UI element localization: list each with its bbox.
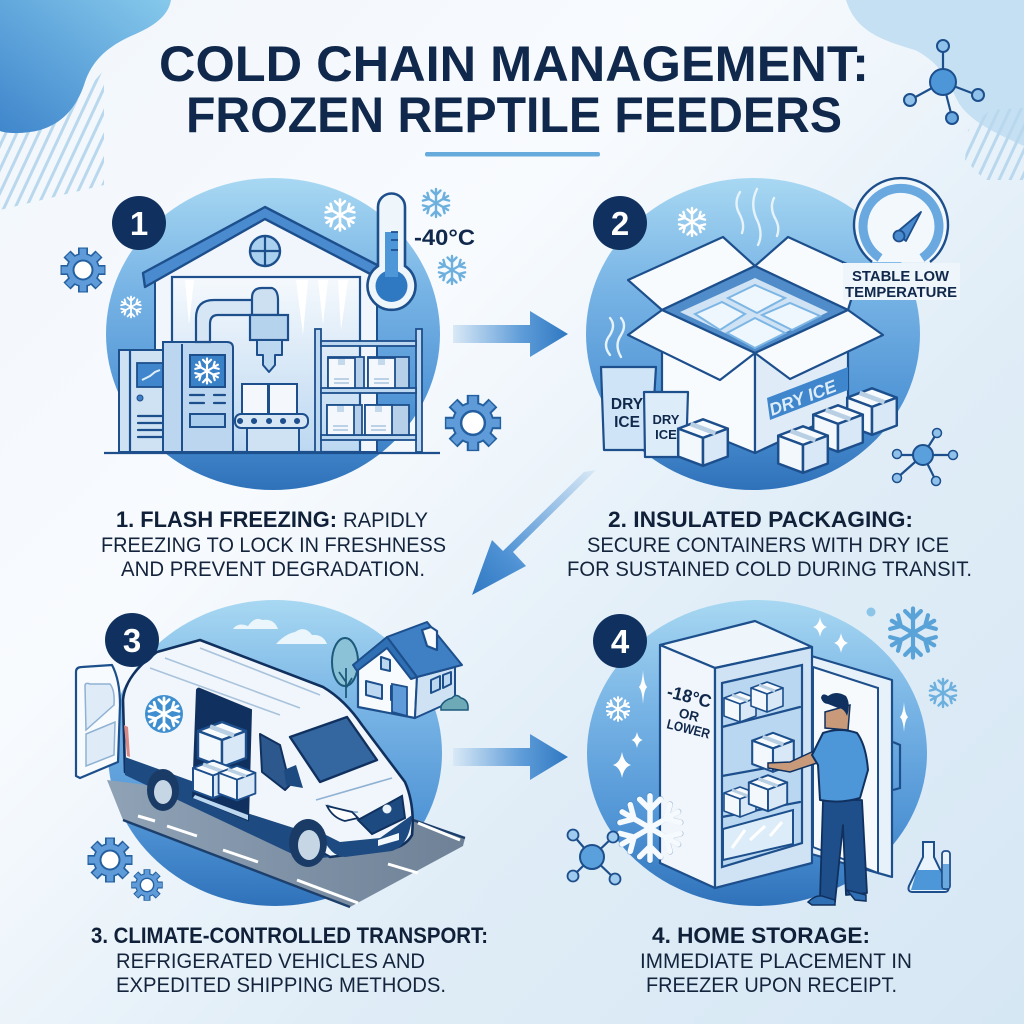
floor line: [104, 452, 440, 454]
number badge 1: 1: [130, 205, 148, 242]
title underline: [425, 152, 600, 156]
icon: flask: [908, 842, 950, 892]
icon: factory building: [143, 207, 381, 452]
icon: molecule right: [892, 428, 958, 486]
icon: freezer: LOWER: [665, 716, 712, 742]
icon: dry ice packs: ICE: [614, 414, 640, 431]
decorative blob top right: [846, 0, 1024, 146]
icon: molecule lower left of panel 4: [568, 830, 620, 884]
number badge 1: [112, 196, 166, 250]
text: step 1 caption: RAPIDLY: [343, 509, 428, 532]
decorative blob top left: [0, 0, 171, 133]
icon: person: [768, 693, 868, 905]
number badge 3: 3: [123, 622, 141, 659]
icon: freezer: -18°C: [665, 681, 714, 712]
icon: gear right: [445, 395, 501, 451]
number badge 4: [593, 614, 647, 668]
icon: snowflake: [678, 208, 706, 236]
icon: house and tree: [332, 622, 468, 718]
circle background 4: [587, 600, 927, 906]
icon: dry ice packs: DRY: [611, 396, 644, 413]
decorative hatch top left: [0, 70, 104, 210]
icon: road: [107, 780, 465, 907]
text: step 3 caption: [91, 923, 488, 997]
text: step 2 caption: SECURE CONTAINERS WITH DRY ICE: [587, 534, 949, 557]
text: step 2 caption: [567, 507, 972, 581]
title: FROZEN REPTILE FEEDERS: [186, 87, 842, 143]
number badge 3: [105, 613, 159, 667]
icon: open box with dry ice: [628, 237, 883, 453]
arrow 3 to 4: [453, 734, 568, 780]
arrow 2 to 3: [472, 470, 596, 595]
gauge label: TEMPERATURE: [845, 285, 957, 301]
text: step 3 caption: 3. CLIMATE-CONTROLLED TRANSPORT:: [91, 923, 488, 948]
icon: snowflake large front: [616, 795, 684, 861]
panel: step 1 flash freezing: [104, 178, 475, 490]
number badge 2: 2: [611, 205, 629, 242]
text: step 4 caption: [640, 923, 912, 997]
icon: snowflakes and sparkles: [606, 608, 957, 778]
text: step 4 caption: 4. HOME STORAGE:: [652, 923, 870, 948]
text: step 3 caption: REFRIGERATED VEHICLES AND: [116, 950, 425, 973]
number badge 2: [593, 196, 647, 250]
text: step 1 caption: [101, 507, 446, 581]
text: step 1 caption: AND PREVENT DEGRADATION.: [121, 558, 425, 581]
icon: thermometer: [367, 194, 416, 310]
arrow 1 to 2: [453, 311, 568, 357]
circle background 2: [586, 178, 920, 490]
icon: open box with dry ice: DRY ICE: [766, 375, 840, 420]
icon: refrigerated van: [76, 640, 413, 867]
text: step 3 caption: EXPEDITED SHIPPING METHODS.: [116, 974, 446, 997]
icon: molecule top right: [904, 40, 984, 124]
panel: step 4 home storage: [587, 600, 957, 906]
temperature label: -40°C: [414, 225, 475, 250]
icon: dry ice packs: [601, 318, 688, 457]
gauge label: STABLE LOW: [852, 269, 949, 285]
text: step 2 caption: 2. INSULATED PACKAGING:: [608, 507, 913, 532]
text: step 4 caption: IMMEDIATE PLACEMENT IN: [640, 950, 912, 973]
icon: gear left: [60, 248, 106, 292]
icon: dry ice packs: DRY: [653, 412, 680, 427]
panel: step 2 insulated packaging: [586, 178, 960, 490]
icon: freezing machine: [119, 288, 308, 452]
circle background 1: [106, 178, 440, 490]
icon: small cartons: [678, 388, 897, 473]
icon: gears bottom left: [88, 838, 163, 901]
panel: step 3 transport: [76, 600, 468, 907]
icon: snowflakes: [120, 189, 466, 318]
text: step 1 caption: FREEZING TO LOCK IN FRESHNESS: [101, 534, 446, 557]
icon: dry ice packs: ICE: [655, 427, 677, 442]
icon: clouds: [233, 619, 327, 644]
icon: storage shelves: [315, 329, 422, 452]
icon: freezer: OR: [677, 705, 701, 725]
title: COLD CHAIN MANAGEMENT:: [159, 36, 869, 92]
text: step 1 caption: 1. FLASH FREEZING:: [116, 507, 337, 532]
icon: freezer: [660, 621, 900, 888]
text: step 2 caption: FOR SUSTAINED COLD DURING TRANSIT.: [567, 558, 972, 581]
text: step 4 caption: FREEZER UPON RECEIPT.: [646, 974, 897, 997]
number badge 4: 4: [611, 623, 630, 660]
gauge label: [843, 263, 960, 301]
circle background 3: [108, 600, 442, 906]
title: [159, 36, 869, 143]
icon: steam: [736, 189, 778, 245]
icon: gauge: [854, 178, 948, 262]
decorative hatch top right: [965, 108, 1024, 180]
